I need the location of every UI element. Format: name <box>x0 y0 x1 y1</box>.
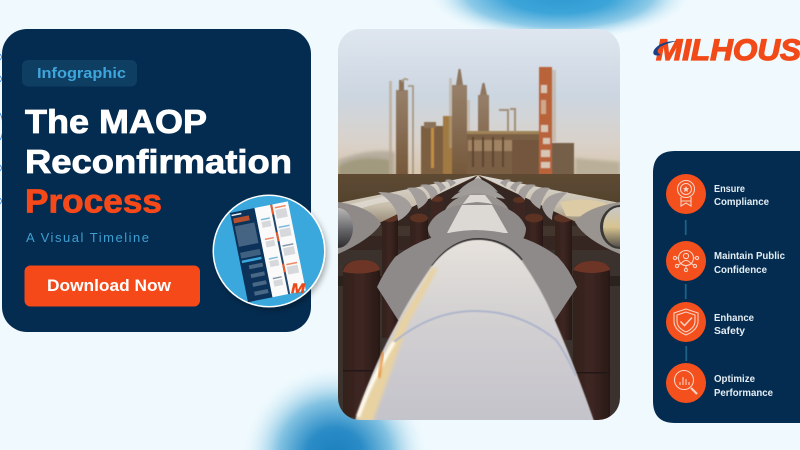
badge: Infographic <box>22 60 137 86</box>
second saddle <box>428 202 526 239</box>
button: Download Now: Download Now <box>47 277 171 295</box>
third pipe <box>462 195 493 205</box>
thumbnail: infographic preview: M <box>291 280 305 296</box>
sky <box>338 29 620 179</box>
panel: benefits <box>653 151 800 423</box>
item: Optimize Performance: Optimize <box>714 374 756 385</box>
posts <box>382 195 572 340</box>
refinery <box>389 67 574 176</box>
thumbnail: infographic preview <box>212 194 326 308</box>
title <box>25 103 292 220</box>
icon: award ribbon <box>678 180 694 206</box>
pipe weld seam <box>394 311 576 376</box>
connectors <box>685 220 687 361</box>
second pipe <box>447 205 508 233</box>
distant hills <box>338 150 620 174</box>
item: Optimize Performance <box>666 363 774 403</box>
item: Optimize Performance: Performance <box>714 388 774 399</box>
pipes: centre row <box>474 175 497 198</box>
icon: people network <box>673 250 699 272</box>
item: Maintain Public Confidence: Maintain Public <box>714 251 786 262</box>
pipes: left row <box>340 175 478 222</box>
icon: safety shield <box>674 309 698 335</box>
item: Maintain Public Confidence <box>666 241 786 281</box>
pipes: right row <box>478 175 618 222</box>
item: Ensure Compliance: Compliance <box>714 197 770 208</box>
nearest big pipe <box>355 240 594 421</box>
icon: magnifier with bars <box>674 370 697 394</box>
subtitle: A Visual Timeline <box>26 230 149 245</box>
item: Enhance Safety: Safety <box>714 326 746 337</box>
button: Download Now <box>24 266 200 306</box>
nearest side saddles <box>338 202 381 254</box>
item: Enhance Safety: Enhance <box>714 313 755 324</box>
item: Enhance Safety <box>666 302 755 342</box>
title: Process <box>25 182 162 220</box>
photo: pipelines leading to a refinery <box>338 29 620 420</box>
ground band <box>338 174 620 202</box>
item: Ensure Compliance <box>666 174 770 214</box>
item: Ensure Compliance: Ensure <box>714 184 746 195</box>
item: Maintain Public Confidence: Confidence <box>714 265 768 276</box>
panel: left promo card <box>2 29 311 332</box>
lower backdrop <box>346 176 611 250</box>
badge: Infographic: Infographic <box>37 66 126 82</box>
nearest saddle <box>377 230 577 320</box>
third saddle <box>445 193 509 210</box>
big posts <box>343 260 380 417</box>
title: The MAOP <box>25 103 207 140</box>
title: Reconfirmation <box>25 143 292 180</box>
